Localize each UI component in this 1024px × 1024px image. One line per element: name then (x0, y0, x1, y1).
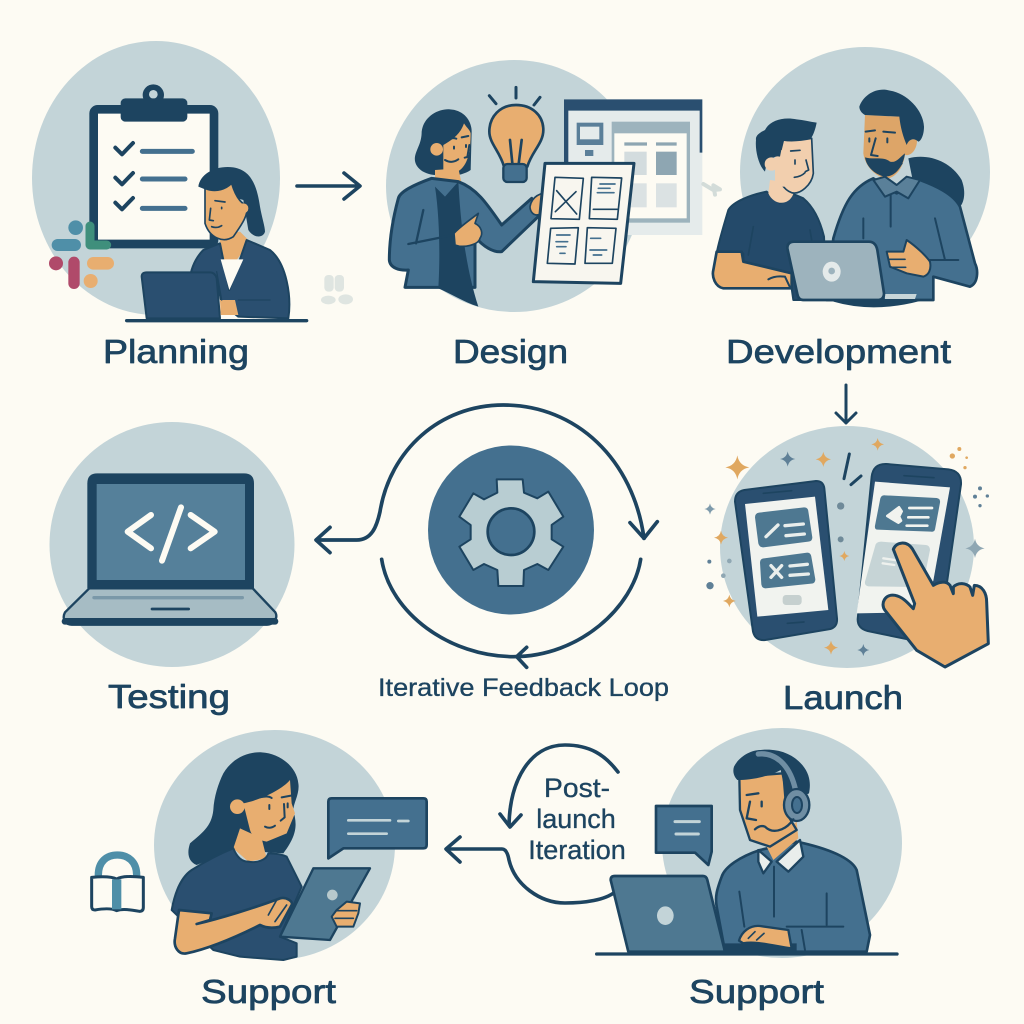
chart: post-launch iteration loop (446, 745, 626, 903)
icon: browser window (564, 99, 720, 235)
testing background circle (50, 422, 294, 667)
loop arc (509, 745, 618, 825)
icon: small speech bubble (656, 806, 712, 865)
arrow: development to launch (836, 385, 856, 423)
loop text: Iteration (528, 835, 626, 865)
arrow: lower loop (382, 559, 641, 657)
icon: four-colour logo (49, 220, 108, 288)
icon: woman with tablet (172, 752, 370, 960)
icon: developer right (827, 90, 977, 307)
icon: agent (716, 750, 870, 952)
icon: laptop with hands (597, 876, 897, 954)
design background circle (386, 60, 642, 312)
icon: gear (459, 479, 563, 586)
heading: planning: Planning (103, 334, 249, 371)
heading: development: Development (726, 334, 952, 371)
panel: development (713, 47, 990, 307)
heading: launch: Launch (783, 680, 903, 717)
panel: planning (32, 41, 353, 321)
gear circle (428, 446, 594, 614)
icon: sparkles (704, 438, 989, 656)
loop head (500, 814, 521, 827)
caption: Iterative Feedback Loop (378, 674, 669, 702)
support user background circle (154, 730, 395, 960)
chart: iterative feedback loop (316, 405, 669, 702)
arrow head: to testing (316, 527, 330, 553)
icon: person at laptop (127, 167, 307, 321)
panel: launch (704, 426, 989, 668)
heading: support left: Support (201, 974, 337, 1011)
icon: light bulb (489, 87, 543, 182)
icon: phone left (735, 481, 837, 640)
arrow: planning to design (297, 173, 360, 199)
panel: support agent (597, 728, 902, 958)
heading: testing: Testing (108, 679, 230, 716)
icon: laptop (787, 242, 917, 300)
icon: developer left (713, 118, 827, 300)
gear hub (488, 508, 534, 555)
heading: support right: Support (689, 974, 825, 1011)
loop text: Post- (544, 773, 610, 803)
panel: testing (50, 422, 294, 667)
icon: pointing hand (883, 543, 988, 667)
icon: open book with arch (92, 855, 143, 911)
icon: speech bubble (328, 798, 427, 858)
launch background circle (720, 426, 974, 668)
icon: clipboard checklist (94, 84, 214, 244)
icon: code laptop (64, 473, 276, 625)
loop text: launch (536, 804, 616, 834)
icon: wireframe sheet (533, 163, 634, 283)
icon: faint glyph (321, 275, 353, 304)
support agent background circle (662, 728, 902, 958)
arrow head: right side (630, 522, 657, 538)
arrow: upper loop (317, 405, 644, 540)
arrow: post-launch to support (447, 849, 615, 903)
planning background circle (32, 41, 280, 315)
arrow head: bottom (517, 647, 527, 667)
icon: presenter (389, 109, 555, 307)
icon: phone right (857, 464, 961, 639)
development background circle (740, 47, 990, 297)
panel: support user (92, 730, 427, 960)
arrow head: to support (446, 837, 460, 862)
panel: design (386, 60, 720, 312)
heading: design: Design (453, 334, 568, 371)
